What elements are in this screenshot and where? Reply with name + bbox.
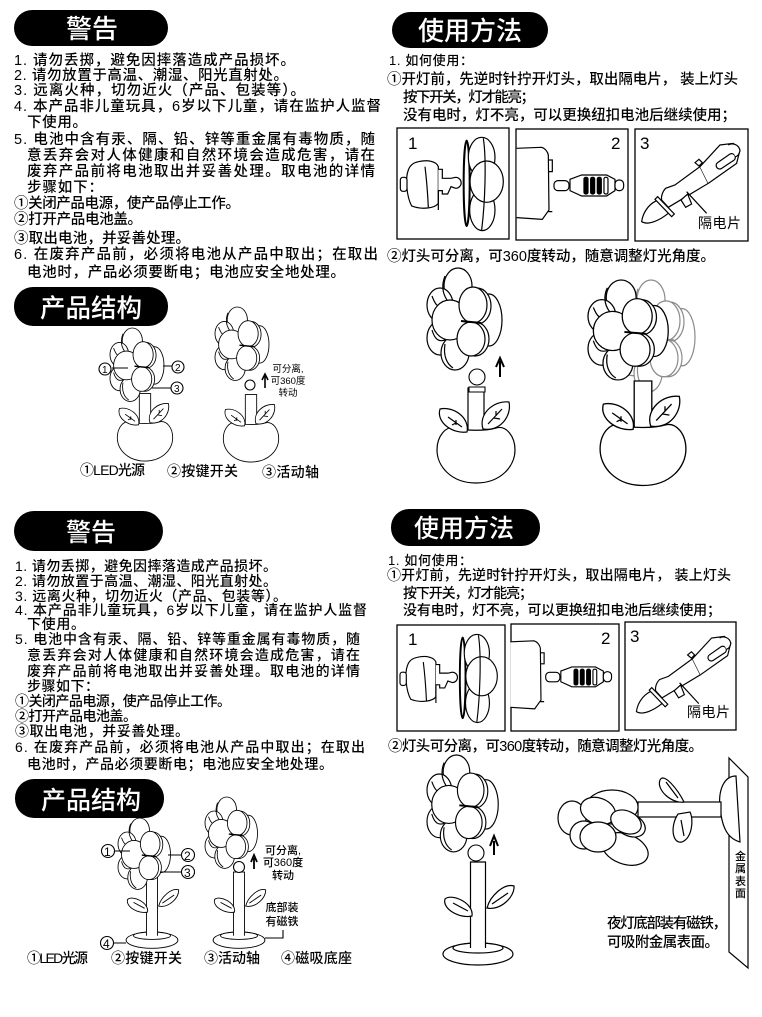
callout: detachable, rotates 360 degrees: 转动: [278, 387, 298, 399]
legend: parts (top): ②按键开关: [167, 463, 238, 479]
text block: how to use (bottom): 没有电时，灯不亮，可以更换纽扣电池后继续使用；: [403, 602, 721, 619]
text block: warnings (bottom): 4. 本产品非儿童玩具，6岁以下儿童，请在监护人监督: [15, 602, 367, 618]
text block: warnings (bottom): 下使用。: [27, 616, 85, 632]
panel: step 2 (bottom): [510, 624, 619, 731]
text block: warnings (top): 5. 电池中含有汞、隔、铅、锌等重金属有毒物质，随: [14, 130, 376, 148]
text block: warnings (bottom): 废弃产品前将电池取出并妥善处理。取电池的详情: [27, 663, 360, 679]
label: metal surface (vertical): 表: [735, 874, 746, 888]
text: head detachable (bottom): ②灯头可分离，可360度转动，随意调整灯光角度。: [388, 737, 703, 755]
diagram: magnetic stand separated: [205, 797, 283, 948]
text block: warnings (bottom): ②打开产品电池盖。: [15, 708, 137, 724]
diagram: large plant with rotated ghost head: [588, 280, 695, 486]
text block: how to use (bottom): 1. 如何使用：: [388, 553, 472, 568]
panel: step 3 (bottom): 3: [630, 627, 639, 646]
heading: usage (bottom): [391, 509, 540, 546]
text block: warnings (top): 1. 请勿丢掷，避免因摔落造成产品损坏。: [14, 51, 295, 69]
diagram: assembled plant with callouts: 1: [102, 365, 108, 376]
heading: usage (top): 使用方法: [418, 16, 522, 46]
text block: warnings (bottom): 1. 请勿丢掷，避免因摔落造成产品损坏。: [15, 558, 277, 574]
text block: how to use (bottom): 按下开关，灯才能亮；: [403, 585, 533, 602]
legend: parts (bottom): ④磁吸底座: [281, 950, 352, 966]
callout: magnet in base: 有磁铁: [266, 914, 298, 928]
diagram: magnetic stand assembled with callouts: 4: [103, 937, 110, 951]
diagram: lamp attached to metal wall: [558, 758, 748, 968]
label: metal surface (vertical): 属: [735, 862, 746, 875]
text: head detachable: ②灯头可分离，可360度转动，随意调整灯光角度。: [387, 247, 715, 265]
text block: warnings (bottom): 电池时，产品必须要断电；电池应安全地处理。: [27, 756, 333, 773]
heading: warning (top): 警告: [66, 14, 118, 44]
panel: step 3: 3: [640, 134, 649, 153]
diagram: large magnetic stand separated: [427, 755, 514, 965]
callout: magnet in base: [266, 900, 298, 928]
label: metal surface (vertical): 面: [735, 888, 746, 900]
text block: warnings (bottom): 3. 远离火种，切勿近火（产品、包装等）。: [15, 588, 287, 604]
heading: product structure (top): 产品结构: [40, 295, 142, 323]
text block: warnings (top): ①关闭产品电源，使产品停止工作。: [14, 195, 240, 212]
text block: warnings (bottom): 5. 电池中含有汞、隔、铅、锌等重金属有毒物质，随: [15, 631, 360, 647]
text block: how to use (top): ①开灯前，先逆时针拧开灯头，取出隔电片， 装上灯头: [387, 70, 738, 88]
diagram: magnetic stand assembled with callouts: 2: [184, 849, 191, 863]
text block: how to use (bottom): ①开灯前，先逆时针拧开灯头，取出隔电片， 装上灯头: [387, 567, 731, 583]
text block: warnings (top): 废弃产品前将电池取出并妥善处理。取电池的详情: [27, 162, 375, 180]
legend: parts (bottom): ③活动轴: [204, 950, 260, 966]
heading: warning (top): [14, 10, 168, 46]
callout: detachable, rotates 360 degrees: [262, 363, 306, 399]
callout: detachable, rotates 360 degrees (bottom): [251, 843, 303, 882]
callout: detachable, rotates 360 degrees: 可360度: [271, 375, 306, 387]
panel: step 3: 隔电片: [698, 215, 741, 231]
diagram: assembled plant with callouts: 3: [174, 384, 180, 395]
text block: how to use (top): 没有电时，灯不亮，可以更换纽扣电池后继续使用；: [403, 107, 736, 124]
legend: parts (bottom): [27, 950, 352, 966]
callout: detachable, rotates 360 degrees (bottom): 可360度: [263, 855, 303, 869]
text block: how to use (top): [387, 53, 738, 124]
text block: warnings (bottom): 2. 请勿放置于高温、潮湿、阳光直射处。: [15, 573, 277, 589]
text block: warnings (top): [14, 51, 381, 281]
heading: warning (bottom): 警告: [66, 519, 116, 547]
text block: warnings (bottom): 步骤如下：: [27, 678, 99, 694]
diagram: assembled plant with callouts: 2: [175, 363, 181, 374]
text block: warnings (top): 电池时，产品必须要断电；电池应安全地处理。: [27, 263, 345, 281]
diagram: magnetic stand assembled with callouts: 1: [104, 845, 111, 859]
text block: warnings (top): 3. 远离火种，切勿近火（产品、包装等）。: [14, 81, 305, 99]
legend: parts (top): ①LED光源: [80, 462, 145, 478]
panel: step 3 (bottom): [625, 622, 736, 730]
diagram: large separated plant: [427, 268, 515, 483]
text block: how to use (top): 按下开关，灯才能亮；: [403, 88, 535, 106]
callout: detachable, rotates 360 degrees: 可分离,: [272, 363, 304, 375]
heading: product structure (bottom): 产品结构: [41, 787, 141, 815]
text block: how to use (bottom): [387, 553, 731, 619]
heading: warning (bottom): [14, 511, 163, 551]
legend: parts (bottom): ②按键开关: [111, 950, 182, 966]
panel: step 2 (bottom): 2: [601, 629, 610, 648]
text: magnet note: [607, 914, 727, 951]
text block: warnings (top): 意丢弃会对人体健康和自然环境会造成危害，请在: [27, 146, 375, 164]
text block: warnings (bottom): [15, 558, 367, 773]
heading: product structure (top): [14, 287, 168, 326]
panel: step 3: [635, 129, 748, 241]
heading: usage (top): [392, 12, 548, 48]
diagram: magnetic stand assembled with callouts: 3: [184, 866, 191, 880]
legend: parts (top): ③活动轴: [262, 464, 319, 480]
callout: detachable, rotates 360 degrees (bottom): 转动: [272, 868, 294, 882]
text block: warnings (top): 步骤如下：: [27, 179, 103, 196]
text block: warnings (top): ②打开产品电池盖。: [14, 211, 142, 228]
text: magnet note: 可吸附金属表面。: [607, 933, 719, 951]
text block: warnings (top): 6. 在废弃产品前，必须将电池从产品中取出；在取出: [14, 245, 378, 263]
diagram: magnetic stand assembled with callouts: [100, 818, 194, 951]
heading: usage (bottom): 使用方法: [414, 515, 514, 543]
text block: warnings (top): 下使用。: [27, 114, 87, 131]
text block: warnings (top): ③取出电池，并妥善处理。: [14, 230, 190, 247]
legend: parts (bottom): ①LED光源: [27, 950, 88, 966]
label: metal surface (vertical): 金: [735, 849, 746, 863]
label: metal surface (vertical): [735, 849, 746, 900]
panel: step 3 (bottom): 隔电片: [687, 704, 730, 720]
text block: how to use (top): 1. 如何使用：: [389, 53, 473, 68]
panel: step 1 (bottom): [397, 625, 505, 731]
panel: step 2: [516, 129, 628, 240]
text block: warnings (top): 4. 本产品非儿童玩具，6岁以下儿童，请在监护人监督: [14, 97, 381, 115]
diagram: separated plant: [215, 307, 279, 462]
text: magnet note: 夜灯底部装有磁铁，: [607, 914, 727, 932]
panel: step 2: 2: [611, 134, 620, 153]
text block: warnings (top): 2. 请勿放置于高温、潮湿、阳光直射处。: [14, 67, 288, 84]
panel: step 1: [397, 128, 509, 239]
diagram: assembled plant with callouts: [99, 328, 184, 461]
panel: step 1: 1: [408, 134, 417, 153]
callout: magnet in base: 底部装: [266, 900, 298, 914]
panel: step 1 (bottom): 1: [408, 630, 417, 649]
heading: product structure (bottom): [15, 779, 164, 818]
text block: warnings (bottom): 意丢弃会对人体健康和自然环境会造成危害，请在: [27, 647, 360, 663]
legend: parts (top): [80, 462, 319, 480]
callout: detachable, rotates 360 degrees (bottom): 可分离,: [265, 843, 301, 857]
text block: warnings (bottom): ③取出电池，并妥善处理。: [15, 723, 189, 739]
text block: warnings (bottom): ①关闭产品电源，使产品停止工作。: [15, 693, 231, 709]
text block: warnings (bottom): 6. 在废弃产品前，必须将电池从产品中取出；在取出: [15, 739, 365, 756]
